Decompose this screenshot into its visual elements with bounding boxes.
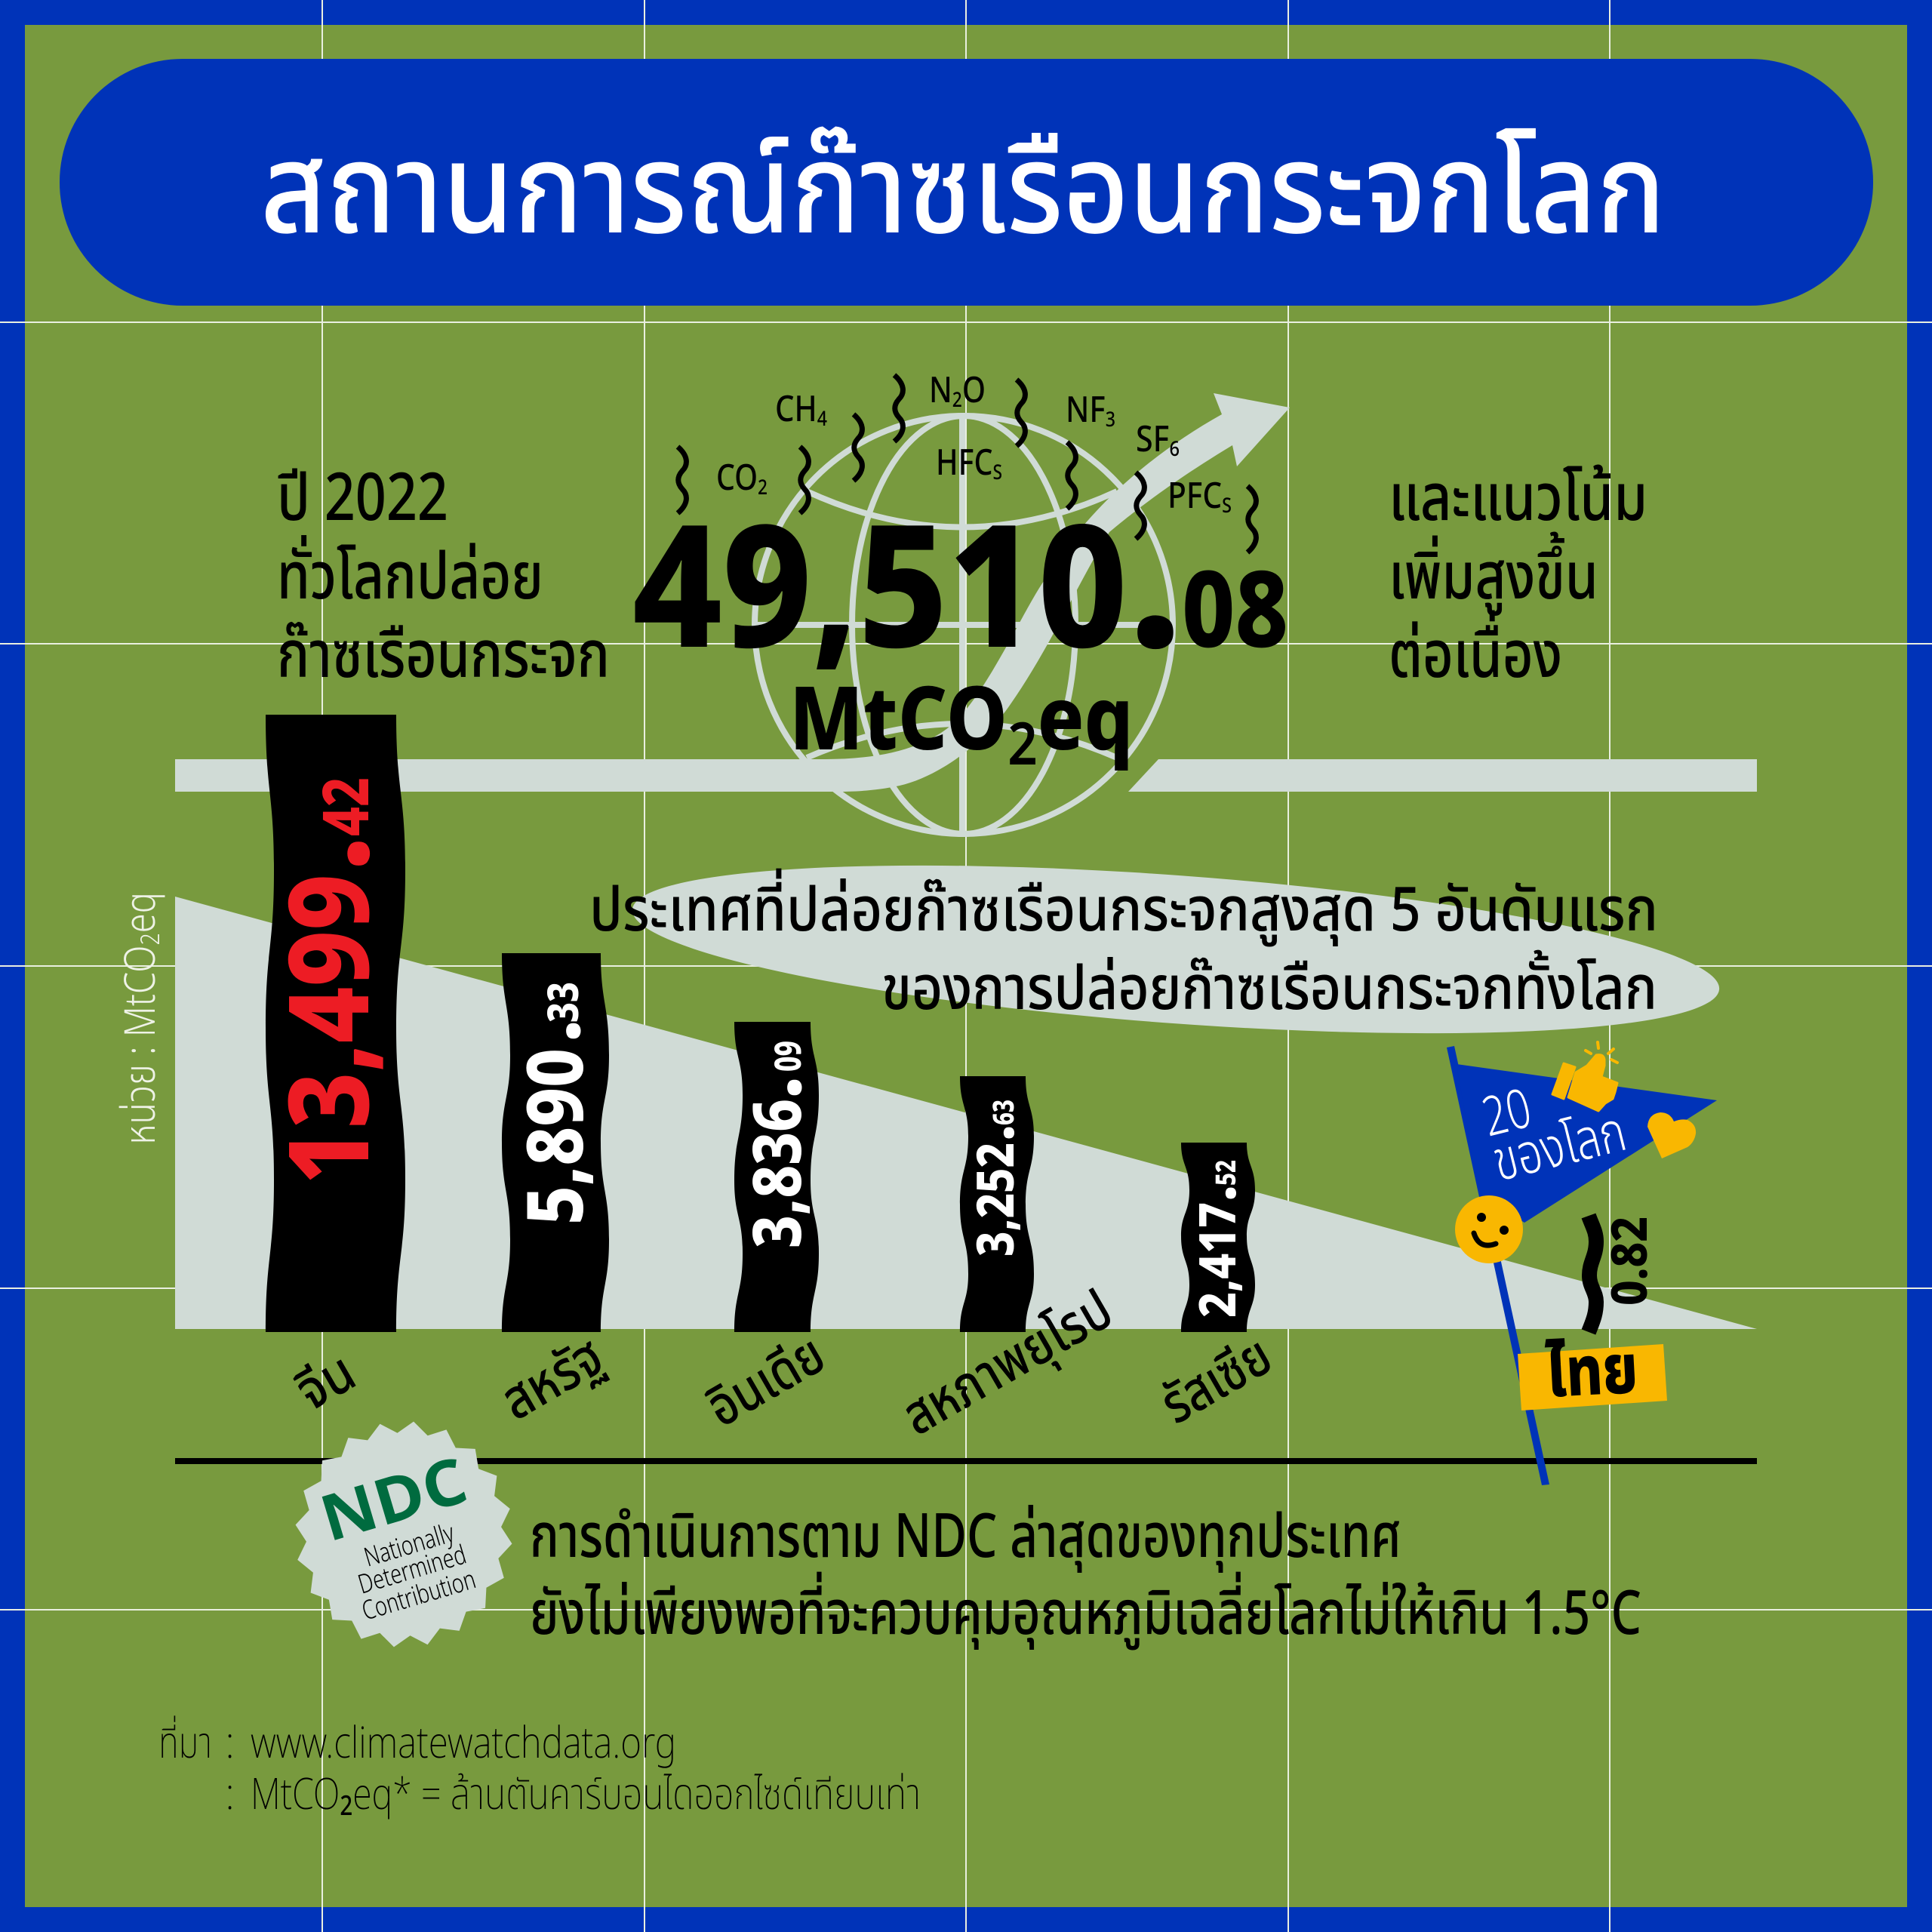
intro text left: ปี 2022 [277, 451, 448, 550]
bar: China: 13,499 [251, 874, 419, 1185]
label: NF3: NF [1066, 385, 1112, 438]
country label: India: อินเดีย [692, 1316, 841, 1451]
label: PFCs: S [1222, 491, 1232, 522]
rising trend arrow [175, 393, 1290, 792]
NDC badge: Nationally [359, 1514, 460, 1578]
label: HFCs: HFC [936, 438, 1004, 491]
Thailand value wiggle [1589, 1216, 1596, 1332]
bar: USA: . [491, 1019, 617, 1043]
total emissions number: 08 [1182, 534, 1288, 694]
unit label: 2 [133, 933, 171, 946]
label: CO2: CO [716, 453, 766, 506]
intro text left: ทั่วโลกปล่อย [277, 530, 543, 629]
label: NF3: 3 [1106, 405, 1115, 436]
label: SF6: SF [1136, 414, 1174, 468]
source notes: eq* = ล้านตันคาร์บอนไดออกไซด์เทียบเท่า [352, 1764, 921, 1829]
gas labels and wiggles [678, 365, 1256, 552]
label: CO2: 2 [758, 473, 768, 504]
bar: EU [949, 1076, 1041, 1332]
label: HFCs: S [992, 458, 1002, 489]
bar: India: . [712, 1075, 838, 1100]
bar: USA: 5,890 [501, 1048, 618, 1225]
bar: China: 42 [301, 777, 397, 836]
intro text right: เพิ่มสูงขึ้น [1389, 530, 1598, 629]
bar: Russia: 2,417 [1183, 1202, 1259, 1318]
bar: USA [491, 953, 618, 1332]
bar: China [232, 715, 426, 1332]
source notes: : [225, 1764, 235, 1829]
label: N2O: 2 [952, 386, 962, 417]
source notes: MtCO [251, 1764, 360, 1829]
globe icon [755, 416, 1174, 834]
top five caption: ของการปล่อยก๊าซเรือนกระจกทั้งโลก [881, 945, 1657, 1037]
country label: EU: สหภาพยุโรป [888, 1271, 1129, 1459]
label: N2O: N [929, 365, 956, 419]
bar: Russia: 52 [1206, 1160, 1248, 1186]
source notes: 2 [340, 1787, 352, 1828]
total unit: 2 [1008, 703, 1038, 792]
total unit: eq [1038, 657, 1134, 789]
bar: EU: . [949, 1124, 1041, 1141]
total emissions number: 49,510 [632, 467, 1128, 724]
country label: Russia: รัสเซีย [1146, 1318, 1289, 1447]
bar: India [712, 1022, 838, 1332]
intro text right: และแนวโน้ม [1389, 451, 1647, 550]
flag: Thailand marker [1447, 1042, 1717, 1485]
label: CH4: CH [775, 384, 824, 438]
horizontal rule [175, 1458, 1757, 1464]
title: สถานการณ์ก๊าซเรือนกระจกโลก [260, 100, 1666, 290]
NDC badge [285, 1412, 522, 1657]
icon: smiley [1455, 1195, 1523, 1263]
total emissions number: . [1128, 442, 1183, 734]
NDC statement: ยังไม่เพียงพอที่จะควบคุมอุณหภูมิเฉลี่ยโลกไม่ให้เกิน 1.5°C [530, 1570, 1641, 1662]
unit label: หน่วย : MtCO [111, 908, 174, 1145]
NDC badge: NDC [310, 1435, 479, 1569]
NDC badge: Determined [353, 1536, 471, 1605]
label: SF6: 6 [1169, 435, 1180, 466]
source notes: : [225, 1712, 235, 1777]
bar: EU: 63 [984, 1100, 1027, 1125]
source notes [158, 1712, 921, 1829]
country label: USA: สหรัฐ [486, 1317, 620, 1443]
bar: India: 09 [762, 1041, 817, 1072]
intro text left [277, 451, 610, 707]
bar: Russia: . [1171, 1185, 1263, 1201]
title banner [60, 59, 1873, 306]
NDC statement: การดำเนินการตาม NDC ล่าสุดของทุกประเทศ [530, 1493, 1401, 1585]
label: PFCs: PFC [1168, 471, 1230, 525]
bar: EU: 3,252 [959, 1143, 1037, 1257]
bar: USA: 33 [534, 982, 598, 1023]
flag text: share of world: ของโลก [1484, 1091, 1635, 1206]
label: N2O: O [962, 365, 986, 419]
bar: China: . [232, 835, 426, 872]
source notes: ที่มา [158, 1712, 212, 1777]
country label: China: จีน [281, 1333, 372, 1433]
unit label: eq [111, 892, 174, 933]
flag text: 20: 20 [1475, 1070, 1540, 1161]
right band segment [1128, 759, 1757, 792]
intro text right: ต่อเนื่อง [1389, 608, 1562, 707]
bar: India: 3,836 [731, 1099, 831, 1248]
label: CH4: 4 [817, 405, 827, 435]
Thailand value: 0.82 [1595, 1217, 1669, 1306]
source notes: www.climatewatchdata.org [251, 1712, 676, 1777]
icon: heart [1647, 1112, 1696, 1158]
intro text left: ก๊าซเรือนกระจก [277, 608, 610, 707]
icon: thumbs up [1552, 1042, 1617, 1111]
bar: Russia [1171, 1143, 1263, 1332]
NDC statement [530, 1493, 1641, 1662]
declining wedge [175, 897, 1757, 1329]
top five caption: ประเทศที่ปล่อยก๊าซเรือนกระจกสูงสุด 5 อันดับแรก [589, 866, 1658, 958]
Thailand label: ไทย [1543, 1319, 1641, 1429]
total unit: MtCO [789, 657, 1036, 789]
intro text right [1389, 451, 1647, 707]
top five caption [589, 835, 1724, 1063]
NDC badge: Contribution [357, 1561, 481, 1632]
